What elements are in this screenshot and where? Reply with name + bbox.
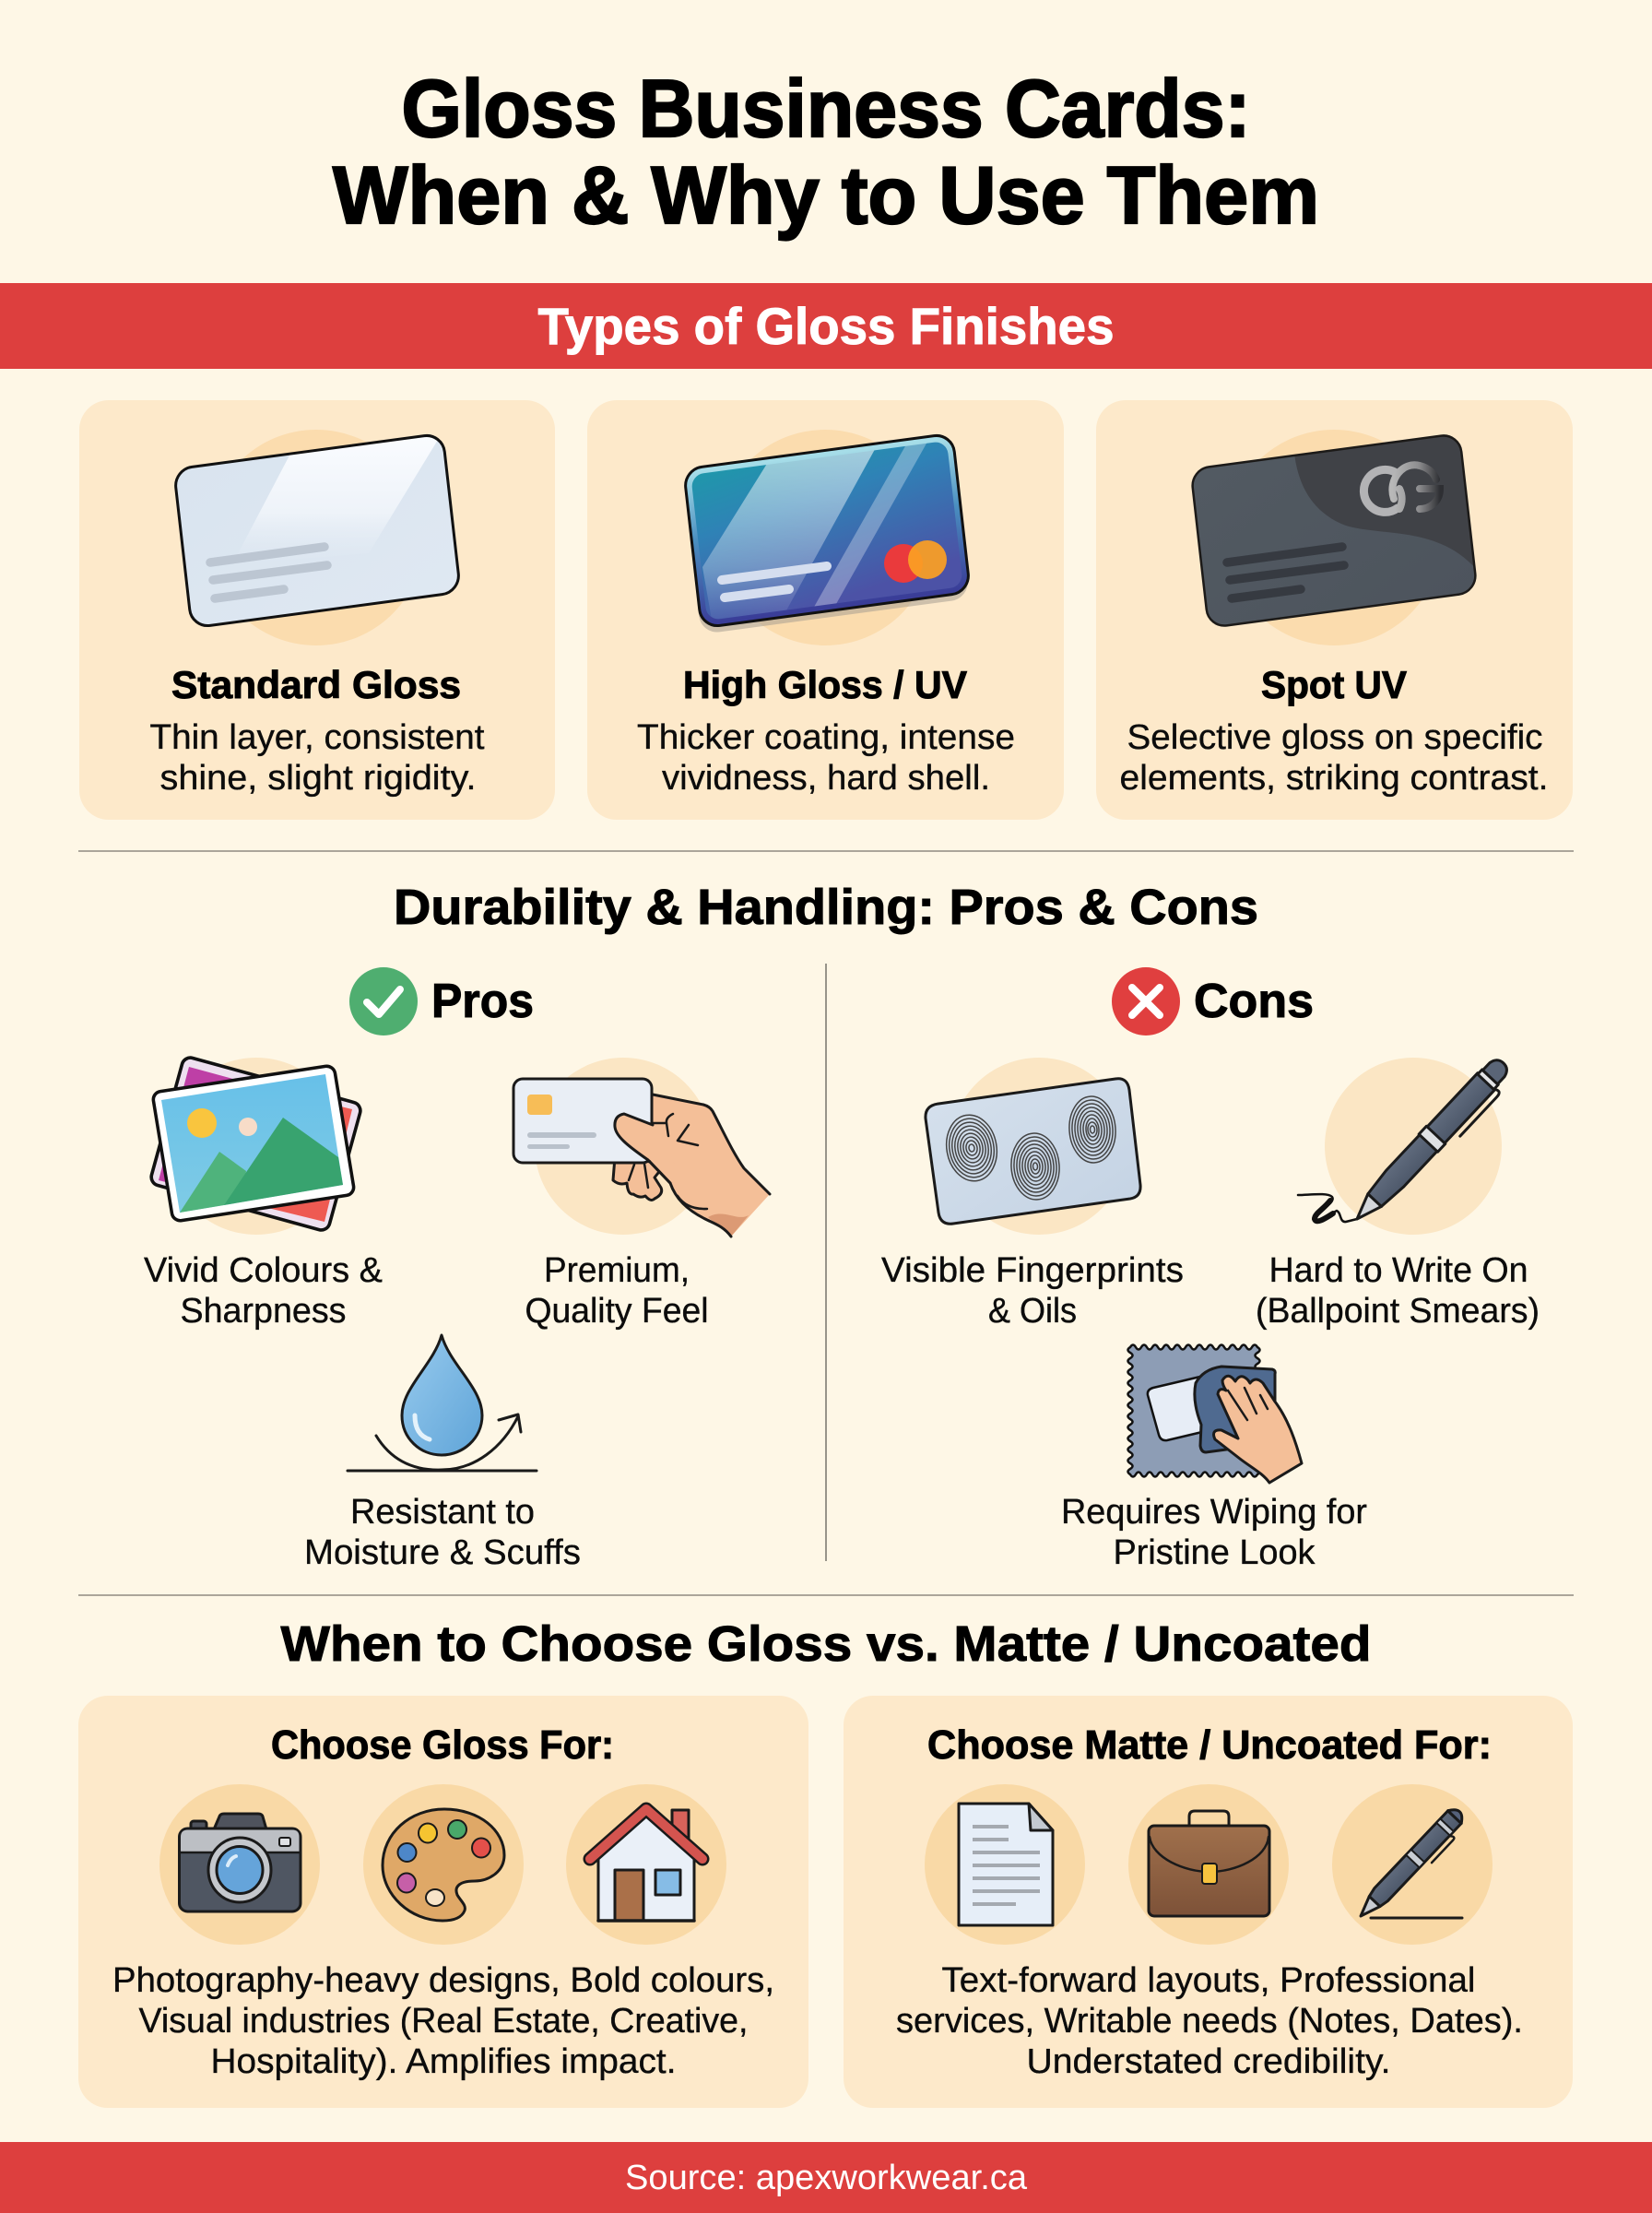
text: high gloss uv: Thicker coating, intense xyxy=(637,718,1015,757)
icon: paint palette xyxy=(363,1784,524,1945)
icon: hand holding card xyxy=(513,1058,770,1237)
icon: wiping cloth xyxy=(1128,1344,1302,1483)
icon: pen xyxy=(1332,1784,1493,1945)
cons heading xyxy=(1112,967,1314,1035)
text: spot uv xyxy=(1119,663,1549,798)
text: high gloss uv xyxy=(637,663,1015,798)
text: matte use cases xyxy=(896,1961,1523,2081)
text: gloss use cases: Hospitality). Amplifies impact. xyxy=(210,2042,677,2081)
pros heading xyxy=(349,967,534,1035)
icon: water drop xyxy=(348,1335,537,1471)
text: matte use cases: Text-forward layouts, Professional xyxy=(942,1961,1475,2000)
heading: choose matte for: Choose Matte / Uncoated For: xyxy=(927,1722,1492,1768)
label: visible fingerprints xyxy=(881,1251,1184,1331)
label: premium feel: Premium, xyxy=(544,1251,690,1290)
icon: vivid photos xyxy=(149,1056,362,1235)
title: When & Why to Use Them xyxy=(333,149,1319,241)
cons heading: Cons xyxy=(1194,975,1314,1028)
icon: standard gloss card xyxy=(173,433,461,628)
label: requires wiping: Requires Wiping for xyxy=(1061,1493,1367,1532)
text: standard gloss: Thin layer, consistent xyxy=(149,718,485,757)
heading: durability and handling: Durability & Handling: Pros & Cons xyxy=(394,880,1258,935)
label: hard to write on xyxy=(1256,1251,1540,1331)
heading: when to choose: When to Choose Gloss vs. Matte / Uncoated xyxy=(280,1616,1372,1672)
pros heading: Pros xyxy=(431,975,534,1028)
section banner: types of gloss finishes xyxy=(0,283,1652,369)
footer: source xyxy=(0,2142,1652,2213)
panel: high gloss uv xyxy=(587,400,1064,820)
icon: document xyxy=(925,1784,1085,1945)
icon: pen smearing ink xyxy=(1298,1054,1516,1235)
text: gloss use cases: Visual industries (Real Estate, Creative, xyxy=(138,2002,749,2041)
pros column xyxy=(144,967,770,1572)
text: spot uv: Selective gloss on specific xyxy=(1127,718,1543,757)
icon: briefcase xyxy=(1128,1784,1289,1945)
section banner: types of gloss finishes: Types of Gloss Finishes xyxy=(538,297,1114,355)
text: spot uv: elements, striking contrast. xyxy=(1119,759,1549,798)
text: standard gloss: Standard Gloss xyxy=(171,663,461,706)
icon: camera xyxy=(159,1784,320,1945)
label: vivid colours: Sharpness xyxy=(181,1292,347,1331)
cons column xyxy=(881,967,1540,1572)
text: standard gloss: shine, slight rigidity. xyxy=(160,759,476,798)
text: matte use cases: services, Writable needs (Notes, Dates). xyxy=(896,2002,1523,2041)
text: high gloss uv: vividness, hard shell. xyxy=(662,759,990,798)
text: matte use cases: Understated credibility. xyxy=(1027,2042,1390,2081)
icon: house xyxy=(566,1784,726,1945)
panel: choose matte xyxy=(844,1696,1573,2108)
label: premium feel: Quality Feel xyxy=(525,1292,708,1331)
text: gloss use cases: Photography-heavy designs, Bold colours, xyxy=(112,1961,774,2000)
label: vivid colours xyxy=(144,1251,383,1331)
text: spot uv: Spot UV xyxy=(1261,663,1407,706)
label: moisture resistance: Moisture & Scuffs xyxy=(304,1533,581,1572)
text: high gloss uv: High Gloss / UV xyxy=(683,663,967,706)
footer: source: Source: apexworkwear.ca xyxy=(625,2159,1028,2197)
title xyxy=(333,63,1319,241)
icon: high gloss card xyxy=(683,433,971,634)
panel: choose gloss xyxy=(78,1696,808,2108)
label: premium feel xyxy=(525,1251,708,1331)
label: moisture resistance: Resistant to xyxy=(350,1493,535,1532)
label: vivid colours: Vivid Colours & xyxy=(144,1251,383,1290)
heading: choose gloss for: Choose Gloss For: xyxy=(271,1722,614,1768)
label: requires wiping: Pristine Look xyxy=(1114,1533,1316,1572)
label: visible fingerprints: Visible Fingerprints xyxy=(881,1251,1184,1290)
label: hard to write on: (Ballpoint Smears) xyxy=(1256,1292,1540,1331)
label: visible fingerprints: & Oils xyxy=(988,1292,1077,1331)
icon: spot uv card xyxy=(1191,434,1477,627)
panel: spot uv xyxy=(1096,400,1573,820)
label: hard to write on: Hard to Write On xyxy=(1268,1251,1528,1290)
icon: fingerprint card xyxy=(926,1058,1140,1235)
text: standard gloss xyxy=(149,663,485,798)
label: requires wiping xyxy=(1061,1493,1367,1572)
label: moisture resistance xyxy=(304,1493,581,1572)
panel: standard gloss xyxy=(79,400,555,820)
title: Gloss Business Cards: xyxy=(402,63,1250,154)
text: gloss use cases xyxy=(112,1961,774,2081)
